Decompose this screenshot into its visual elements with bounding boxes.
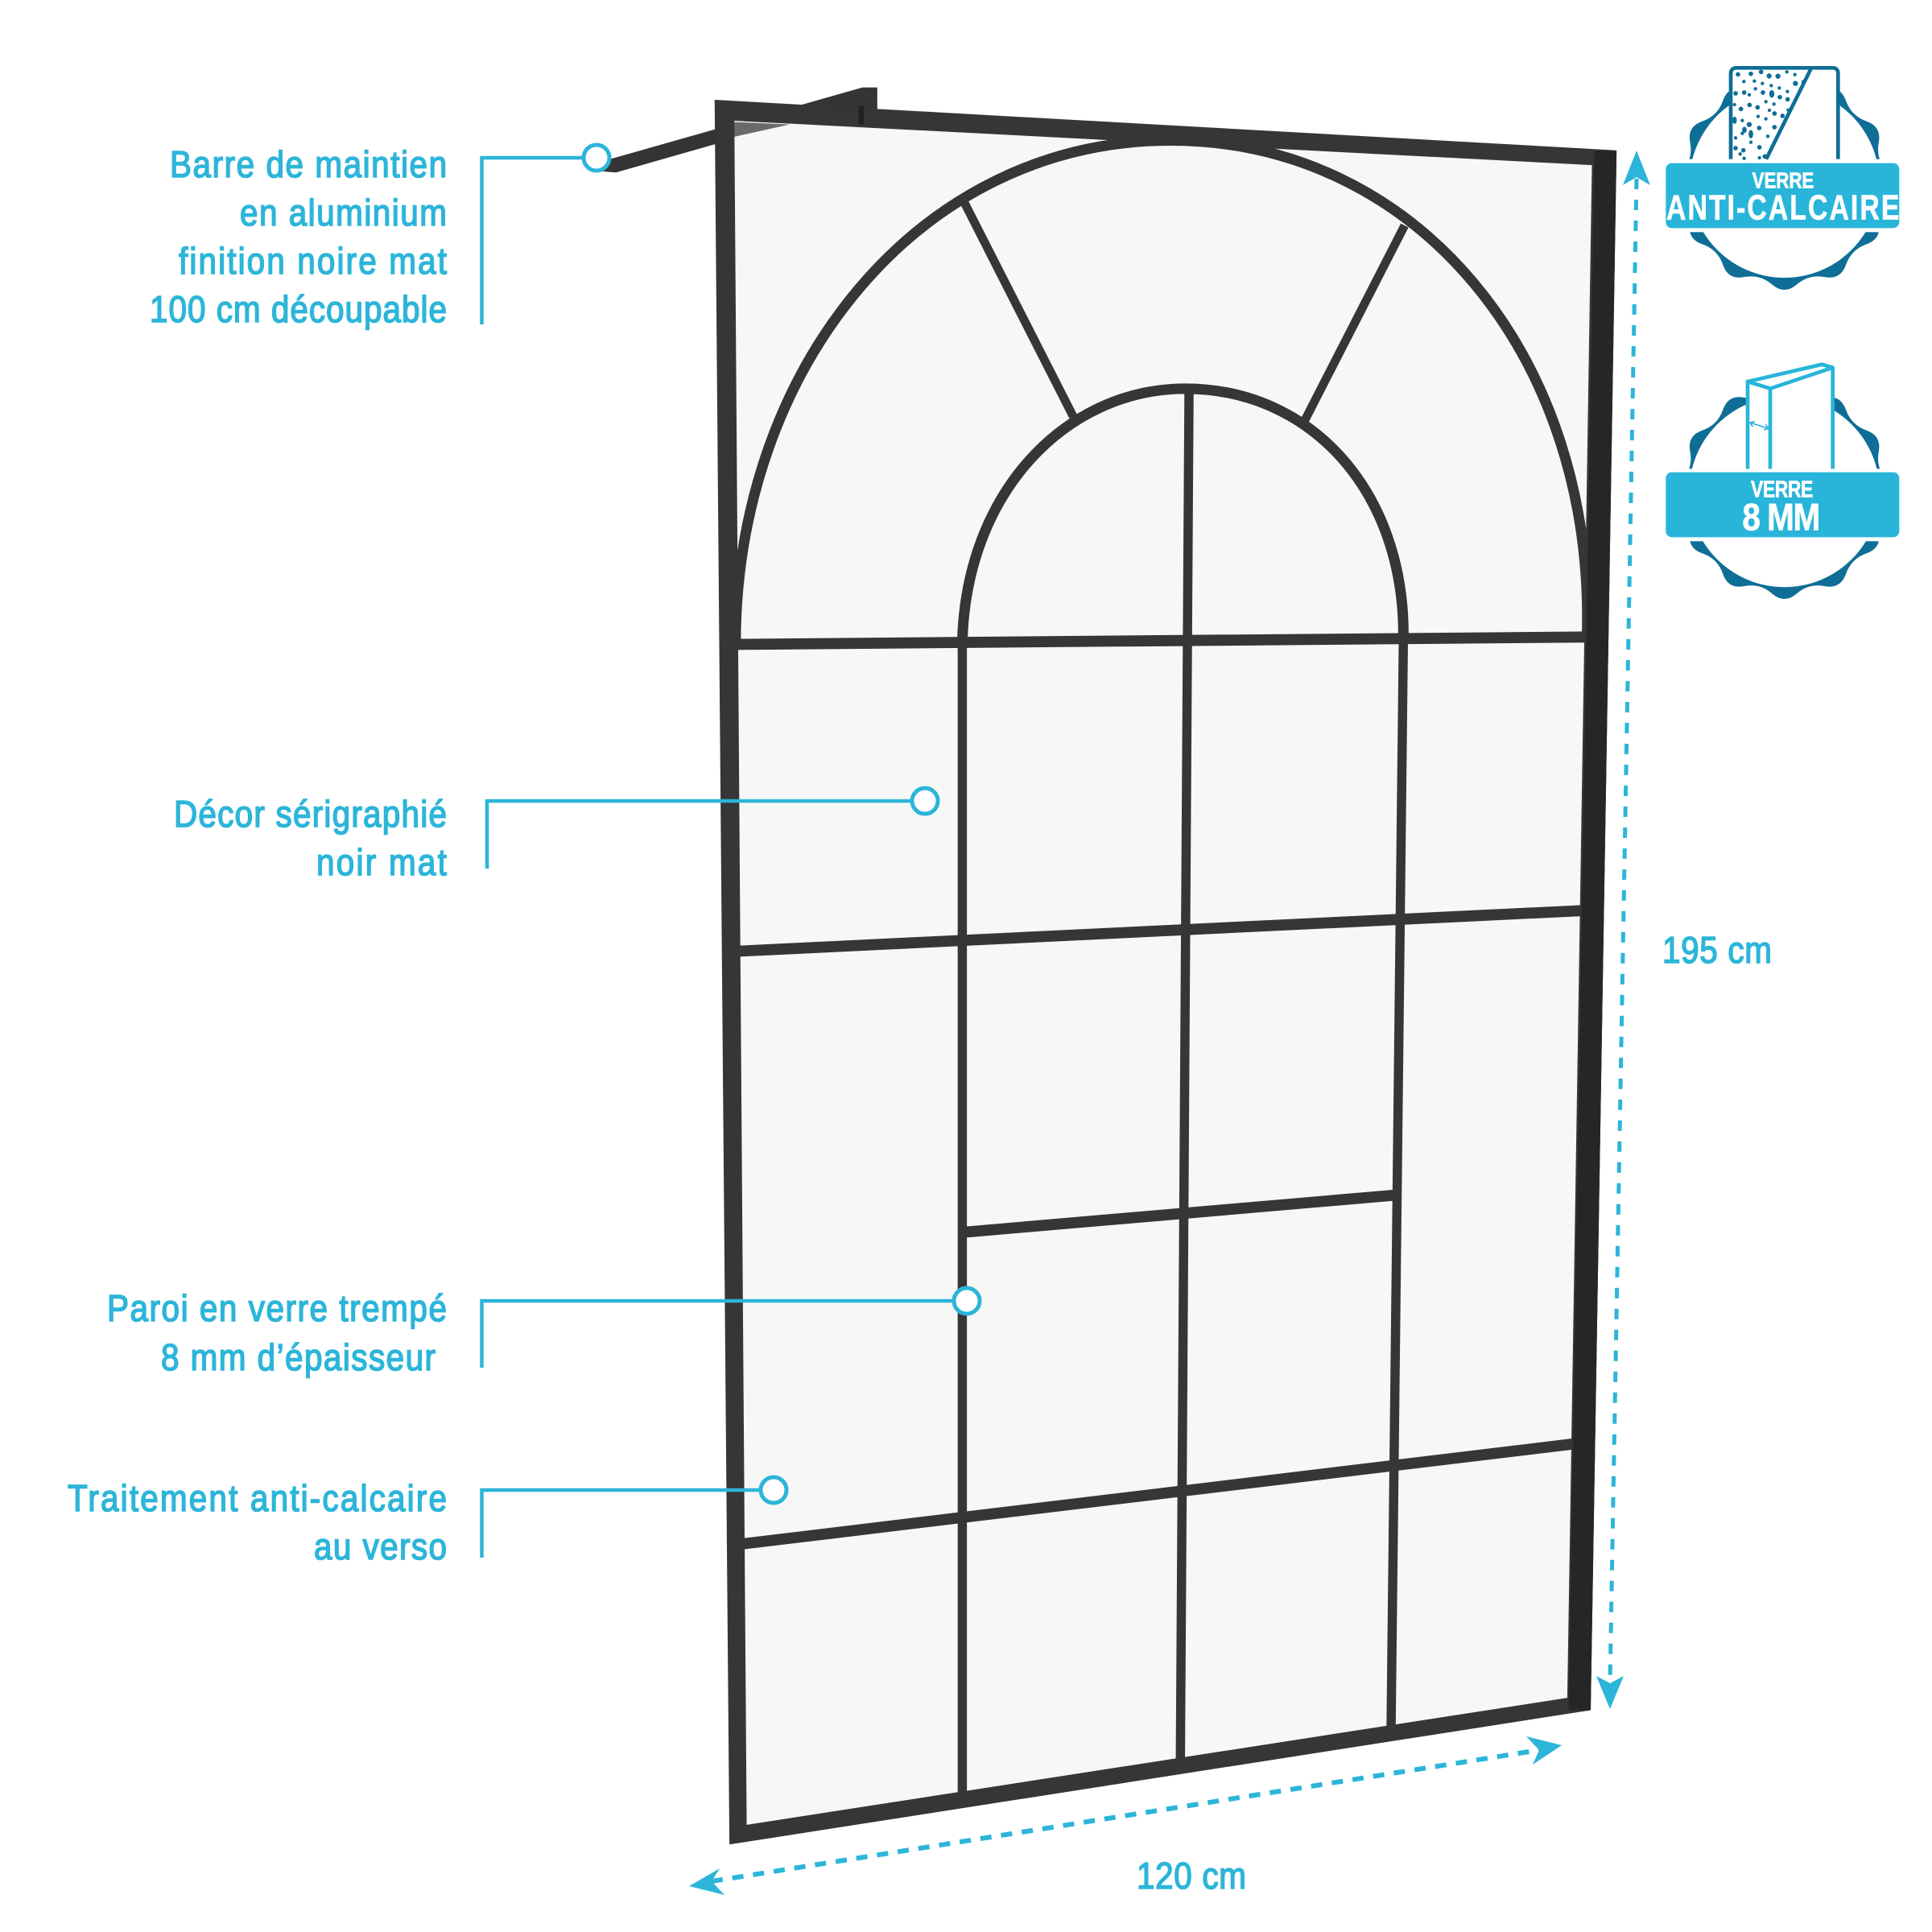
label text <box>68 1479 447 1568</box>
label text: 100 cm découpable <box>150 290 447 331</box>
icon: glass thickness <box>1748 365 1833 469</box>
marker <box>954 1288 980 1314</box>
grid verticals <box>962 392 1403 1794</box>
icon: glass panel <box>1731 68 1838 159</box>
label text: en aluminium <box>240 193 447 234</box>
badge: verre anti-calcaire <box>1664 68 1902 290</box>
outer frame <box>715 100 1616 1844</box>
right side post <box>1568 151 1616 1710</box>
inner arch <box>962 389 1403 645</box>
leader line <box>481 1490 761 1558</box>
gap behind banner <box>1664 469 1902 541</box>
glass pane <box>734 121 1592 1825</box>
support bar seen through glass <box>734 122 790 137</box>
label text: noir mat <box>316 843 447 884</box>
label text: Paroi en verre trempé <box>107 1289 447 1330</box>
dimension arrow: width <box>689 1736 1562 1895</box>
right spoke <box>1302 225 1405 425</box>
badge: verre 8 mm <box>1664 365 1902 599</box>
label text: 8 mm d’épaisseur <box>161 1338 436 1379</box>
banner text: VERRE <box>1752 168 1814 193</box>
scalloped seal <box>1678 76 1892 290</box>
outer arch <box>736 140 1587 645</box>
label text: Traitement anti-calcaire <box>68 1479 447 1520</box>
arrowhead bottom <box>1596 1676 1624 1709</box>
limescale dots <box>1732 70 1805 159</box>
height value: 195 cm <box>1662 931 1772 972</box>
banner <box>1666 163 1899 228</box>
banner text: 8 MM <box>1742 496 1820 539</box>
label text: finition noire mat <box>179 242 447 283</box>
marker <box>584 145 609 171</box>
banner <box>1666 473 1899 537</box>
banner text <box>1742 477 1820 539</box>
dashed line <box>712 1750 1539 1881</box>
seal inner circle <box>1690 88 1880 278</box>
callout: barre de maintien <box>150 145 609 331</box>
arrowhead right <box>1526 1736 1562 1765</box>
grid horizontals <box>736 637 1587 1544</box>
label text <box>150 145 447 331</box>
banner text: VERRE <box>1751 477 1813 502</box>
label text <box>107 1289 447 1379</box>
leader line <box>481 1301 954 1368</box>
arrowhead left <box>689 1868 724 1895</box>
leader line <box>487 801 912 869</box>
leader line <box>481 158 584 324</box>
label text <box>174 795 447 884</box>
thickness arrow <box>1750 422 1769 430</box>
gap behind banner <box>1664 159 1902 232</box>
width value: 120 cm <box>1137 1856 1246 1897</box>
shower panel product <box>601 88 1616 1844</box>
callout: paroi en verre trempé <box>107 1288 980 1379</box>
banner text: ANTI-CALCAIRE <box>1666 189 1899 228</box>
label text: Barre de maintien <box>170 145 447 186</box>
marker <box>761 1477 786 1503</box>
seal inner circle <box>1689 397 1880 587</box>
scalloped seal <box>1678 385 1892 599</box>
label text: au verso <box>314 1527 447 1568</box>
callout: traitement anti-calcaire <box>68 1477 786 1568</box>
dashed line <box>1610 179 1637 1682</box>
label text: Décor sérigraphié <box>174 795 447 836</box>
callout: décor sérigraphié <box>174 788 938 884</box>
dimension arrow: height <box>1596 151 1650 1709</box>
diagonal <box>1766 69 1810 159</box>
banner text <box>1666 168 1899 228</box>
arrowhead top <box>1623 151 1650 185</box>
left spoke <box>964 204 1073 416</box>
support bar <box>601 88 877 172</box>
marker <box>912 788 938 814</box>
bracket <box>859 106 864 125</box>
screen-printed window decor <box>736 140 1587 1794</box>
